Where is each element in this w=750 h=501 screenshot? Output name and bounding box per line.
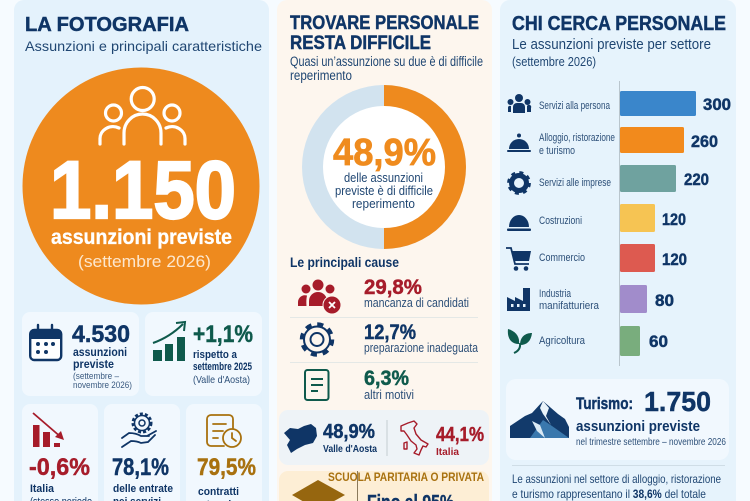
cause: altri motivi [305, 367, 414, 402]
card: +1,1%: (Valle d'Aosta) [193, 374, 250, 386]
stat: valle d'aosta: Valle d'Aosta [323, 443, 377, 455]
card: 79,5%: contratti [198, 486, 239, 498]
main stat circle: (settembre 2026) [78, 252, 211, 271]
row: commercio: Commercio [539, 252, 585, 264]
card: 78,1% [104, 404, 180, 501]
cause: altri motivi: altri motivi [364, 388, 414, 402]
icon: document with clock [207, 415, 241, 447]
heading: le principali cause: Le principali cause [290, 255, 399, 270]
row: industria [507, 285, 674, 313]
icon: map valle d'aosta [284, 424, 317, 453]
heading: chi cerca personale: Le assunzioni previste per settore [512, 37, 711, 53]
row: industria: 80 [655, 292, 674, 310]
row: agricoltura: Agricoltura [539, 335, 586, 347]
card: 4.530 assunzioni: (settembre – [73, 371, 120, 382]
donut chart: 48,9% [333, 132, 436, 174]
row: servizi alle imprese [508, 165, 709, 194]
row: alloggio: e turismo [539, 145, 575, 157]
icon: cart [506, 248, 531, 271]
row: industria: Industria [539, 288, 572, 300]
card: 4.530 assunzioni: previste [73, 359, 114, 371]
donut chart: previste è di difficile [335, 184, 433, 198]
row: servizi alle imprese: Servizi alle imprese [539, 177, 611, 189]
card: 78,1%: 78,1% [112, 454, 169, 481]
heading: chi cerca personale [512, 13, 726, 69]
row: servizi alla persona [508, 91, 731, 116]
icon: graduation cap [292, 480, 345, 501]
card: turismo [506, 379, 729, 460]
card: 78,1%: delle entrate [113, 483, 173, 495]
card: turismo: assunzioni previste [576, 418, 700, 435]
row: servizi alla persona: Servizi alla persona [539, 100, 611, 112]
donut chart: reperimento [352, 197, 415, 211]
card: 79,5%: 79,5% [197, 454, 256, 481]
card: 4.530 assunzioni [22, 312, 139, 396]
row: costruzioni: 120 [662, 211, 686, 229]
row: costruzioni [507, 204, 686, 232]
note: tourism share: e turismo rappresentano il 38,6% del totale [512, 487, 706, 501]
main stat circle [22, 68, 260, 304]
row: servizi alle imprese: 220 [684, 171, 709, 189]
heading: trovare personale: Quasi un’assunzione su due è di difficile [290, 54, 483, 69]
heading: chi cerca personale: CHI CERCA PERSONALE [512, 13, 726, 35]
card: -0,6% Italia [22, 404, 98, 501]
cause: preparazione inadeguata [302, 321, 478, 355]
icon: gear [302, 324, 332, 354]
row: commercio: 120 [662, 251, 687, 269]
icon: map italy [401, 421, 428, 455]
heading: la fotografia: LA FOTOGRAFIA [25, 14, 189, 36]
heading: la fotografia [25, 14, 262, 54]
donut chart: delle assunzioni [344, 171, 423, 185]
icon: factory [507, 288, 530, 311]
heading: la fotografia: Assunzioni e principali caratteristiche [25, 38, 262, 54]
callout: scuola paritaria: SCUOLA PARITARIA O PRIVATA [328, 470, 484, 484]
row: industria: manifatturiera [539, 300, 600, 312]
card: 4.530 assunzioni: novembre 2026) [73, 380, 132, 391]
row: costruzioni: Costruzioni [539, 215, 582, 227]
stat: valle d'aosta [323, 421, 377, 455]
card: +1,1% [145, 312, 262, 396]
card: 4.530 assunzioni: assunzioni [73, 347, 127, 359]
icon: gear [508, 172, 530, 194]
cause: mancanza di candidati [298, 276, 469, 314]
card: -0,6% Italia: -0,6% [29, 454, 90, 481]
card: +1,1%: rispetto a [193, 349, 238, 361]
cause: mancanza di candidati: 29,8% [364, 276, 422, 299]
stat: italia: Italia [436, 446, 459, 458]
cause: preparazione inadeguata: preparazione inadeguata [364, 341, 478, 355]
icon: rising chart [153, 322, 185, 361]
card: turismo: Turismo: [576, 395, 633, 413]
icon: document [305, 370, 328, 400]
row: alloggio: Alloggio, ristorazione [539, 132, 615, 144]
row: alloggio [507, 127, 718, 157]
cause: mancanza di candidati: mancanza di candidati [364, 296, 469, 310]
stat: valle d'aosta: 48,9% [323, 421, 375, 443]
icon: people with cross [298, 280, 341, 314]
heading: chi cerca personale: (settembre 2026) [512, 55, 596, 69]
row: alloggio: 260 [691, 133, 718, 151]
heading: trovare personale: reperimento [290, 68, 352, 83]
card: +1,1%: settembre 2025 [193, 361, 252, 373]
icon: mountain [510, 401, 569, 438]
stat: italia [436, 424, 484, 458]
heading: trovare personale: RESTA DIFFICILE [290, 33, 431, 54]
icon: service bell [507, 134, 531, 152]
card: -0,6% Italia: Italia [30, 483, 55, 495]
icon: hard hat [507, 215, 531, 231]
row: servizi alla persona: 300 [703, 96, 731, 114]
note: tourism share [512, 472, 721, 501]
panel: chi cerca personale [500, 0, 736, 501]
card: 79,5% [186, 404, 262, 501]
stat: italia: 44,1% [436, 424, 484, 446]
icon: plant [508, 329, 532, 353]
panel: la fotografia [14, 0, 269, 501]
card: turismo: 1.750 [644, 386, 711, 417]
comparison box [279, 410, 489, 465]
bar chart: sectors [506, 81, 731, 366]
cause: preparazione inadeguata: 12,7% [364, 321, 416, 344]
row: agricoltura [508, 326, 668, 356]
icon: people [100, 88, 185, 144]
icon: falling chart [33, 413, 64, 447]
row: commercio [506, 244, 687, 272]
cause: altri motivi: 6,3% [364, 367, 409, 390]
row: agricoltura: 60 [649, 333, 668, 351]
heading: trovare personale [290, 13, 483, 83]
callout: scuola paritaria [279, 470, 489, 501]
heading: trovare personale: TROVARE PERSONALE [290, 13, 479, 34]
icon: calendar [30, 325, 62, 360]
icon: hand with gear [122, 414, 156, 447]
main stat circle: 1.150 [50, 145, 236, 236]
donut chart [302, 85, 466, 249]
card: 4.530 assunzioni: 4.530 [72, 321, 130, 348]
icon: group [508, 94, 531, 113]
card: +1,1%: +1,1% [193, 321, 253, 348]
main stat circle: assunzioni previste [51, 226, 232, 249]
panel: trovare personale [277, 0, 492, 501]
